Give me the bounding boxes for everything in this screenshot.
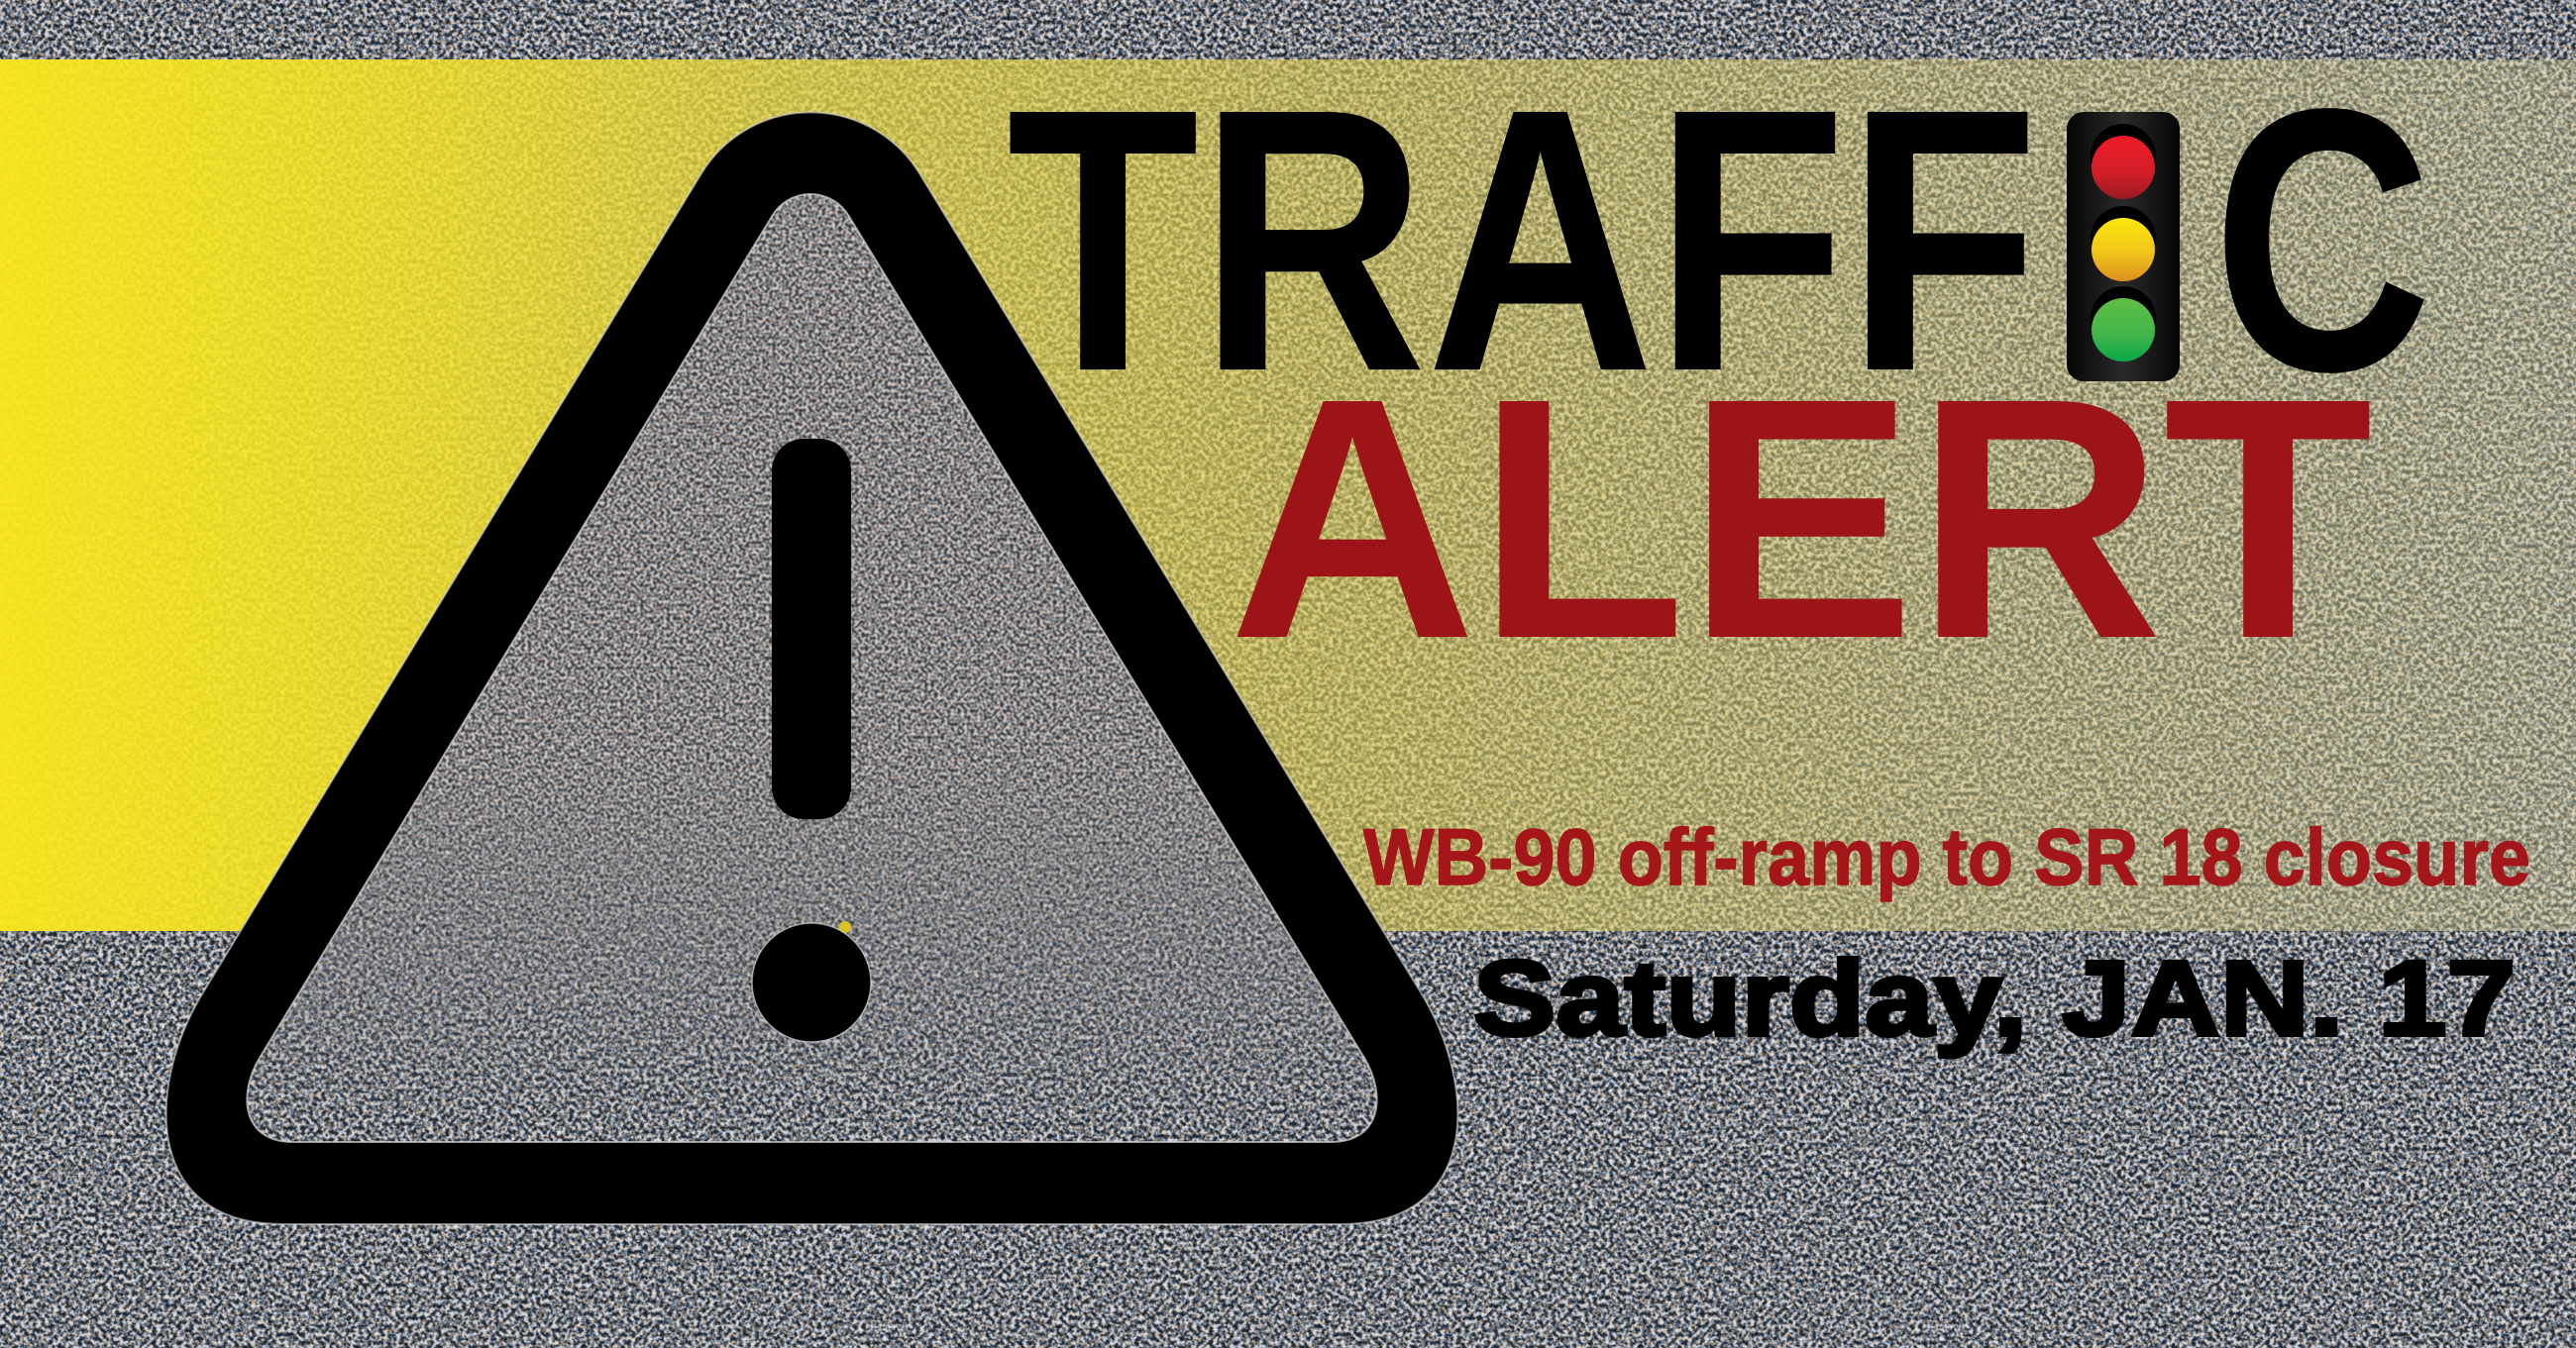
- closure description: WB-90 off-ramp to SR 18 closure: [1363, 813, 2530, 902]
- title letters TRAFF: TRAFF: [1007, 32, 2039, 450]
- exclamation bar: [772, 439, 851, 819]
- date: Saturday, JAN. 17: [1473, 938, 2516, 1058]
- icon: warning triangle: [164, 111, 1458, 1225]
- title: ALERT: ALERT: [1229, 328, 2373, 710]
- icon: traffic light as the letter I: [2067, 112, 2180, 381]
- triangle interior asphalt: [247, 194, 1377, 1142]
- yellow road band: [0, 59, 2576, 931]
- triangle inner light edge: [247, 194, 1377, 1142]
- yellow fleck beside dot: [839, 921, 851, 933]
- exclamation dot: [752, 923, 871, 1042]
- title letter C: C: [2212, 32, 2432, 450]
- triangle outer shape: [166, 112, 1457, 1224]
- title: TRAFFIC: [1007, 32, 2432, 450]
